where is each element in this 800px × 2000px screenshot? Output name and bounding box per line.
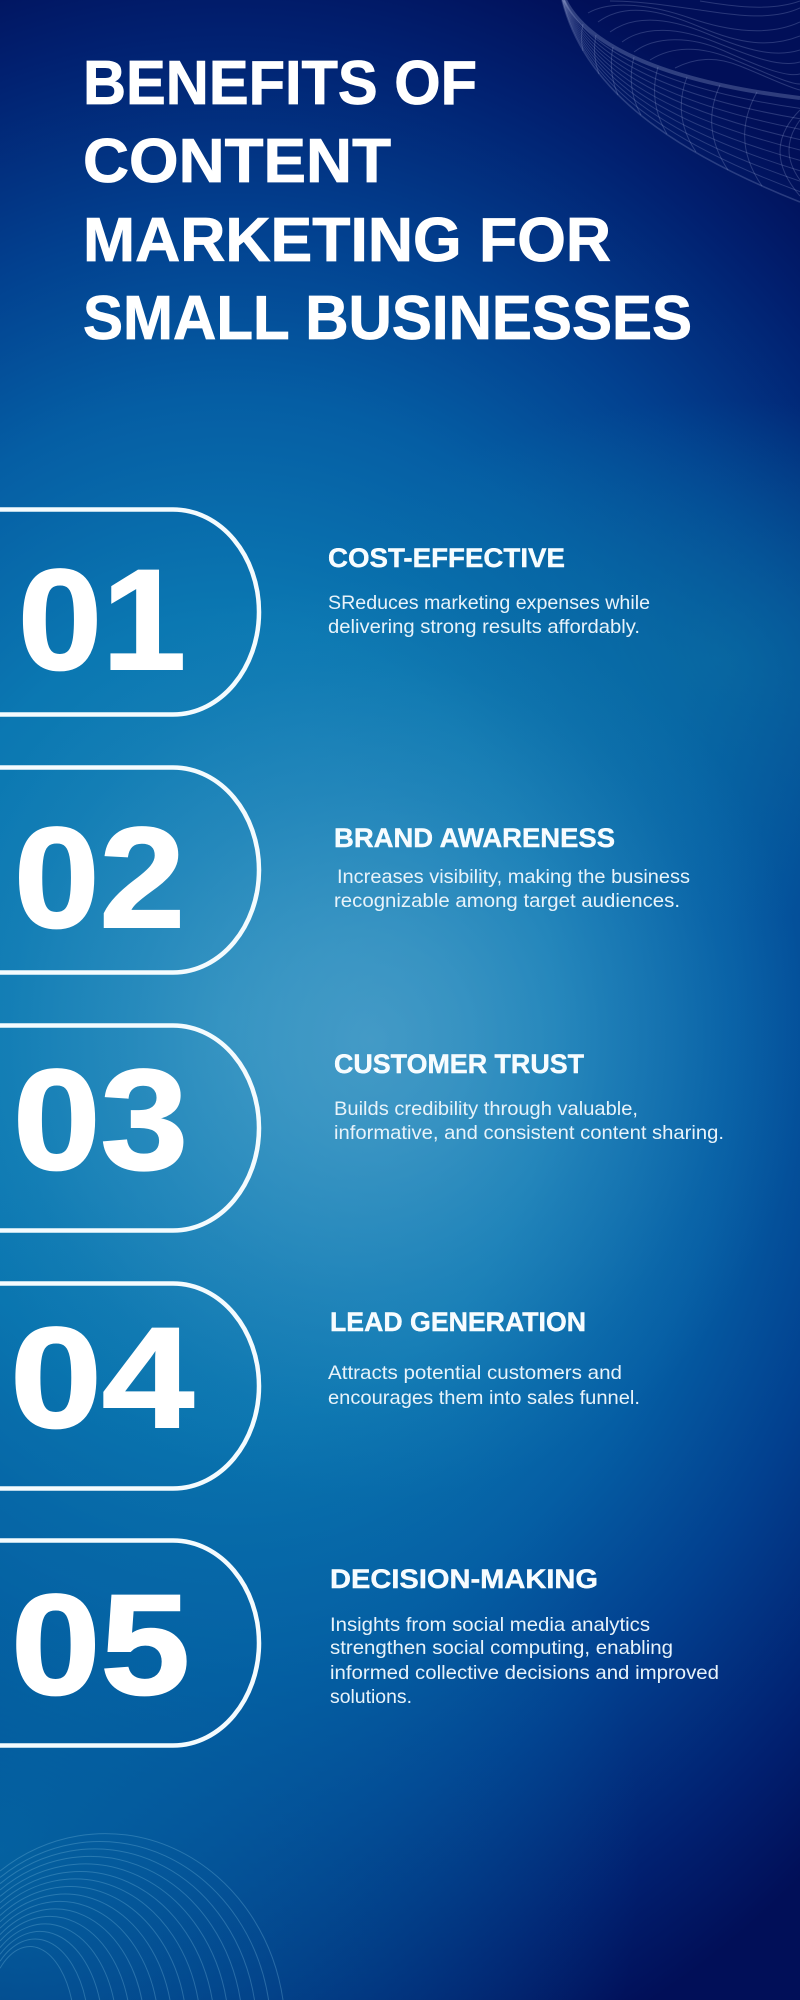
heading: brand awareness: BRAND AWARENESS — [334, 823, 615, 853]
number badge 02 — [0, 768, 259, 972]
decorative wave mesh top right — [562, 0, 800, 202]
number badge 05 — [0, 1540, 259, 1746]
panel: 01 cost-effective — [0, 510, 650, 714]
description: cost-effective: delivering strong results affordably. — [328, 616, 640, 638]
description: lead generation: encourages them into sales funnel. — [328, 1387, 640, 1409]
title: MARKETING FOR — [83, 206, 611, 275]
panel: 05 decision-making — [0, 1540, 719, 1746]
heading: customer trust: CUSTOMER TRUST — [334, 1049, 584, 1079]
description: brand awareness: recognizable among target audiences. — [334, 890, 680, 912]
description: cost-effective — [328, 592, 650, 638]
description: brand awareness — [334, 866, 690, 912]
description: customer trust: Builds credibility through valuable, — [334, 1098, 638, 1120]
number badge 01 — [0, 510, 259, 714]
number badge 02: 02 — [14, 799, 185, 958]
description: decision-making: strengthen social computing, enabling — [330, 1637, 673, 1659]
description: customer trust — [334, 1098, 724, 1144]
heading: lead generation: LEAD GENERATION — [330, 1307, 586, 1337]
description: lead generation: Attracts potential customers and — [328, 1362, 622, 1384]
panel: 03 customer trust — [0, 1026, 724, 1230]
description: lead generation — [328, 1362, 640, 1409]
heading: cost-effective: COST-EFFECTIVE — [328, 543, 565, 573]
title — [83, 49, 692, 353]
title: SMALL BUSINESSES — [83, 284, 692, 353]
number badge 03 — [0, 1026, 259, 1230]
description: brand awareness: Increases visibility, making the business — [337, 866, 690, 888]
description: decision-making: solutions. — [330, 1686, 412, 1708]
description: decision-making — [330, 1614, 719, 1708]
description: decision-making: Insights from social media analytics — [330, 1614, 650, 1636]
panel: 04 lead generation — [0, 1284, 640, 1488]
number badge 04 — [0, 1284, 259, 1488]
title: CONTENT — [83, 127, 391, 196]
description: decision-making: informed collective decisions and improved — [330, 1662, 719, 1684]
number badge 01: 01 — [18, 541, 186, 700]
title: BENEFITS OF — [83, 49, 477, 118]
description: customer trust: informative, and consistent content sharing. — [334, 1122, 724, 1144]
decorative concentric arcs bottom left — [0, 1834, 283, 2000]
number badge 03: 03 — [13, 1041, 188, 1200]
number badge 05: 05 — [11, 1566, 190, 1725]
panel: 02 brand awareness — [0, 768, 690, 972]
heading: decision-making: DECISION-MAKING — [330, 1564, 598, 1594]
description: cost-effective: SReduces marketing expenses while — [328, 592, 650, 614]
number badge 04: 04 — [10, 1299, 194, 1458]
